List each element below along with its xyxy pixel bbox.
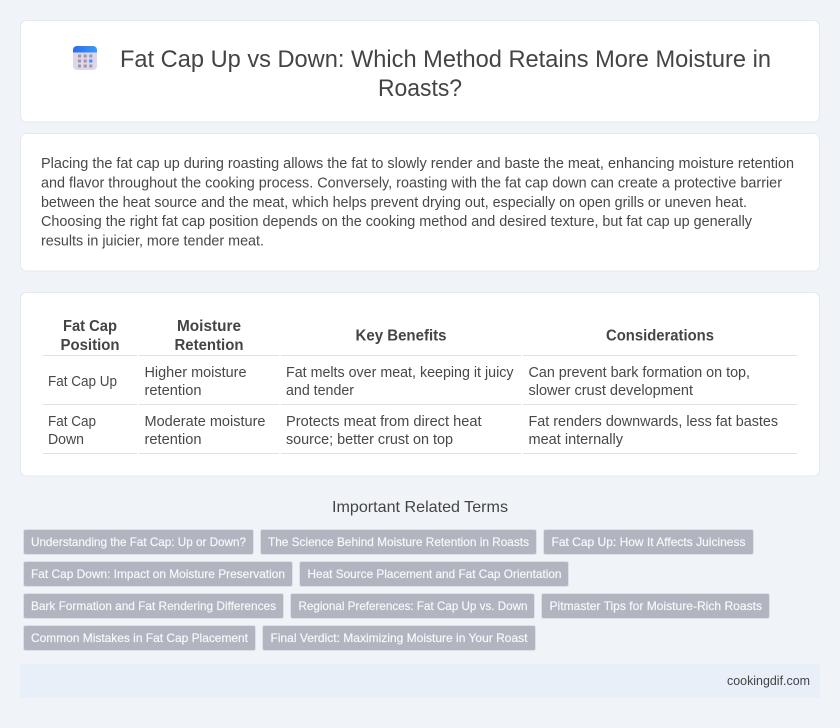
table row: fat cap down: Fat renders downwards, less fat bastes (528, 414, 778, 430)
table row: fat cap up: Fat melts over meat, keeping it juicy (286, 365, 514, 381)
title: Fat Cap Up vs Down: Which Method Retains More Moisture in (120, 46, 771, 73)
text block: introduction paragraph (41, 156, 794, 250)
table row: fat cap down: Moderate moisture (144, 414, 266, 430)
tag (290, 594, 534, 618)
tag: Regional Preferences: Fat Cap Up vs. Down (298, 599, 528, 613)
panel: comparison table (20, 292, 820, 476)
panel: title header (20, 20, 820, 122)
text block: introduction paragraph: and flavor throughout the cooking process. Conversely, roasting with the fat cap down can create a protective barrier (41, 176, 782, 192)
table header: Considerations (606, 328, 714, 344)
tag: Understanding the Fat Cap: Up or Down? (31, 535, 246, 549)
tag: Fat Cap Up: How It Affects Juiciness (552, 535, 746, 549)
tag (262, 626, 536, 650)
table header: Position (60, 337, 120, 354)
tag (542, 594, 770, 618)
table row: fat cap down: retention (144, 432, 202, 448)
icon: calendar (73, 46, 97, 70)
table row: fat cap up (48, 365, 750, 399)
tag: Pitmaster Tips for Moisture-Rich Roasts (550, 599, 762, 613)
tag: Bark Formation and Fat Rendering Differences (31, 599, 276, 613)
table row: fat cap up: Can prevent bark formation on top, (528, 365, 750, 381)
table row: fat cap up: retention (144, 383, 202, 399)
panel: related term tags (24, 530, 770, 650)
tag: Heat Source Placement and Fat Cap Orientation (308, 567, 562, 581)
text block: introduction paragraph: Choosing the right fat cap position depends on the cooking method and desired texture, but fat cap up generally (41, 214, 753, 230)
footer (20, 664, 820, 698)
table row: fat cap down: source; better crust on top (286, 432, 453, 448)
tag (544, 530, 754, 554)
panel: introduction (20, 134, 820, 271)
table row: fat cap down (48, 414, 778, 448)
table row: fat cap up: and tender (286, 383, 354, 399)
table row: fat cap down: Protects meat from direct heat (286, 414, 482, 430)
table header: Key Benefits (356, 328, 446, 344)
tag (300, 562, 568, 586)
table row: fat cap up: Higher moisture (144, 365, 246, 381)
text block: introduction paragraph: results in juicier, more tender meat. (41, 234, 264, 250)
text block: introduction paragraph: between the heat source and the meat, which helps prevent drying out, especially on open grills or uneven heat. (41, 195, 747, 211)
table row: fat cap down: meat internally (528, 432, 624, 448)
footer: cookingdif.com (727, 674, 810, 688)
tag (24, 530, 254, 554)
tag: Common Mistakes in Fat Cap Placement (31, 631, 249, 645)
tag (260, 530, 536, 554)
text block: introduction paragraph: Placing the fat cap up during roasting allows the fat to slowly render and baste the meat, enhancing moisture retention (41, 156, 794, 172)
title (120, 46, 771, 102)
table header: Retention (174, 337, 244, 354)
tag: Fat Cap Down: Impact on Moisture Preservation (31, 567, 285, 581)
heading: important related terms: Important Related Terms (332, 499, 508, 516)
table header (60, 318, 714, 354)
table header: Moisture (177, 318, 241, 335)
tag: The Science Behind Moisture Retention in Roasts (268, 535, 529, 549)
table row: fat cap up: slower crust development (528, 383, 693, 399)
tag: Final Verdict: Maximizing Moisture in Your Roast (270, 631, 528, 645)
tag (24, 626, 256, 650)
table header: Fat Cap (63, 318, 117, 335)
title: Roasts? (378, 75, 462, 102)
table row: fat cap down: Down (48, 432, 84, 448)
tag (24, 562, 292, 586)
table row: fat cap up: Fat Cap Up (48, 374, 117, 390)
tag (24, 594, 284, 618)
table row: fat cap down: Fat Cap (48, 414, 96, 430)
